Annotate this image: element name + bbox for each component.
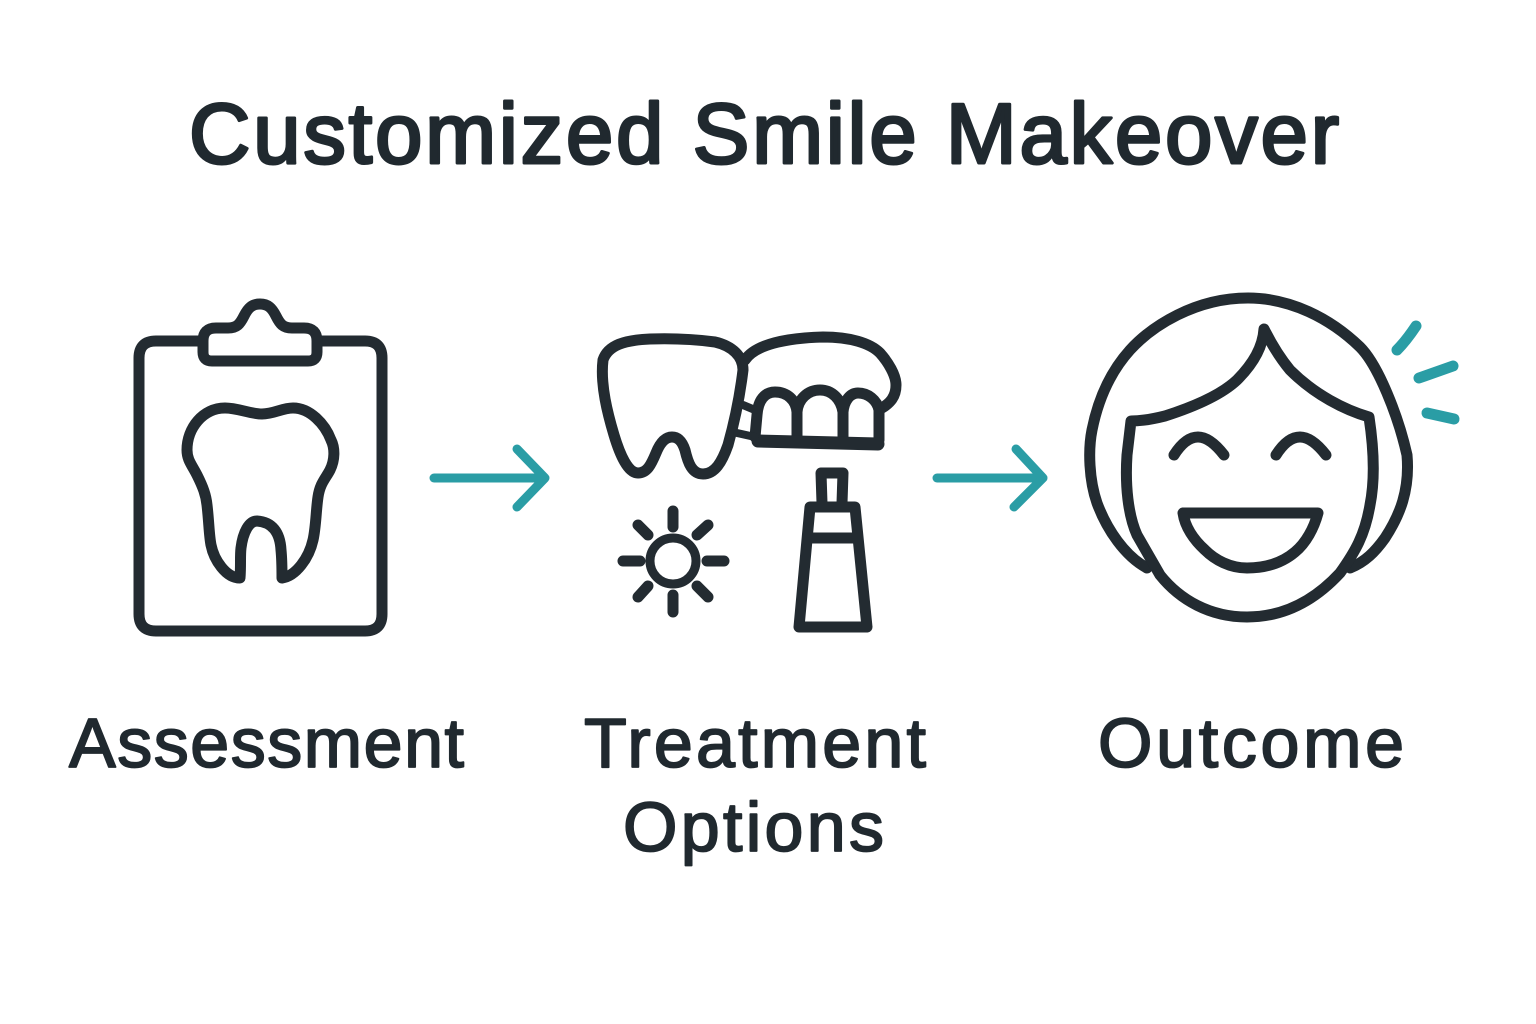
icon: smiling face: [1090, 298, 1408, 617]
label: Outcome: Outcome: [1098, 704, 1404, 782]
arrow: assessment to treatment: [434, 449, 545, 507]
whitening tube: [799, 473, 867, 627]
veneer connector: [737, 405, 755, 437]
veneer bottom bar: [758, 441, 878, 444]
arrow: treatment to outcome: [937, 449, 1043, 507]
label: Treatment Options: Treatment: [584, 704, 926, 782]
tooth outline: [187, 408, 334, 578]
smile: [1183, 513, 1318, 568]
whitening sun: [623, 511, 724, 612]
hair outline: [1090, 298, 1408, 568]
clipboard board: [139, 341, 382, 631]
icon: clipboard with tooth: [139, 304, 382, 631]
label: Assessment: Assessment: [69, 704, 464, 782]
face and fringe: [1126, 329, 1373, 617]
veneer teeth row: [755, 390, 879, 440]
single tooth: [602, 339, 743, 474]
eyes: [1174, 437, 1326, 455]
label: Treatment Options: Options: [623, 788, 884, 866]
label: Treatment Options: [584, 704, 926, 866]
clipboard clip: [203, 304, 317, 361]
icon: treatment options: [602, 337, 896, 627]
icon: sparkle marks: [1397, 326, 1454, 419]
veneer gum arch: [745, 337, 896, 408]
title: Customized Smile Makeover: [189, 87, 1339, 182]
